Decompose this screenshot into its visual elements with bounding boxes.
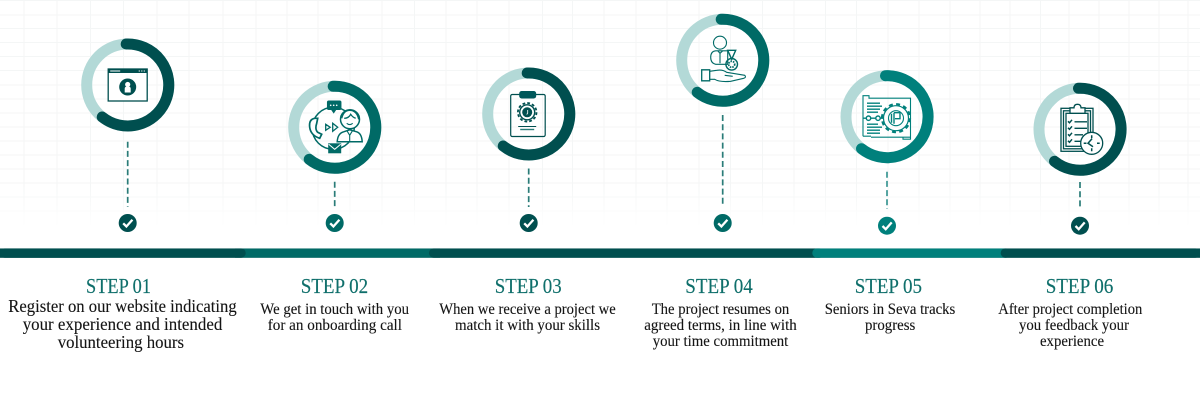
description: step 03: match it with your skills: [455, 317, 600, 334]
progress ring 4: [682, 19, 764, 101]
step 03: [439, 73, 616, 334]
description: step 06: you feedback your: [1019, 317, 1130, 334]
progress ring 1: [87, 44, 169, 126]
heading: step 01: STEP 01: [86, 274, 151, 298]
description: step 02: We get in touch with you: [260, 301, 409, 318]
dashed connector 3: [528, 168, 530, 207]
icon: checklist clipboard with clock: [1061, 104, 1103, 154]
check marker 4: [714, 214, 732, 232]
description: step 03: [439, 301, 616, 334]
step 05: [825, 76, 955, 334]
description: step 04: agreed terms, in line with: [644, 317, 797, 334]
dashed connector 2: [334, 182, 336, 207]
description: step 01: volunteering hours: [58, 332, 184, 352]
heading: step 02: STEP 02: [301, 274, 368, 298]
check marker 1: [119, 214, 137, 232]
step 01: [8, 44, 237, 352]
icon: blueprint with gear: [863, 96, 910, 139]
check marker 2: [326, 214, 344, 232]
description: step 01: [8, 296, 237, 352]
description: step 06: experience: [1040, 333, 1104, 350]
icon: support agent with phone, chat and mail: [310, 101, 362, 153]
icon: clipboard with gear: [511, 91, 545, 136]
description: step 06: [998, 301, 1142, 350]
description: step 05: [825, 301, 955, 334]
step 06: [998, 88, 1142, 350]
description: step 03: When we receive a project we: [439, 301, 616, 318]
timeline bar: [0, 248, 1200, 258]
description: step 05: Seniors in Seva tracks: [825, 301, 955, 318]
check marker 5: [878, 217, 896, 235]
description: step 04: your time commitment: [653, 333, 789, 350]
dashed connector 5: [886, 172, 888, 209]
heading: step 05: STEP 05: [855, 274, 922, 298]
description: step 02: for an onboarding call: [268, 317, 403, 334]
description: step 04: [644, 301, 797, 350]
check marker 6: [1071, 217, 1089, 235]
heading: step 03: STEP 03: [495, 274, 562, 298]
dashed connector 6: [1079, 182, 1081, 209]
heading: step 06: STEP 06: [1046, 274, 1113, 298]
description: step 01: your experience and intended: [23, 314, 223, 334]
progress ring 2: [294, 86, 376, 168]
description: step 04: The project resumes on: [652, 301, 789, 318]
description: step 02: [260, 301, 409, 334]
progress ring 5: [846, 76, 928, 158]
step 04: [644, 19, 797, 350]
progress ring 3: [488, 73, 570, 155]
icon: hand presenting medal to person: [702, 36, 746, 82]
check marker 3: [520, 214, 538, 232]
heading: step 04: STEP 04: [685, 274, 753, 298]
description: step 05: progress: [865, 317, 915, 334]
step 02: [260, 86, 409, 334]
description: step 06: After project completion: [998, 301, 1142, 318]
description: step 01: Register on our website indicating: [8, 296, 237, 316]
progress ring 6: [1039, 88, 1121, 170]
dashed connector 4: [722, 115, 724, 207]
icon: browser profile window: [108, 69, 147, 101]
dashed connector 1: [127, 142, 129, 207]
